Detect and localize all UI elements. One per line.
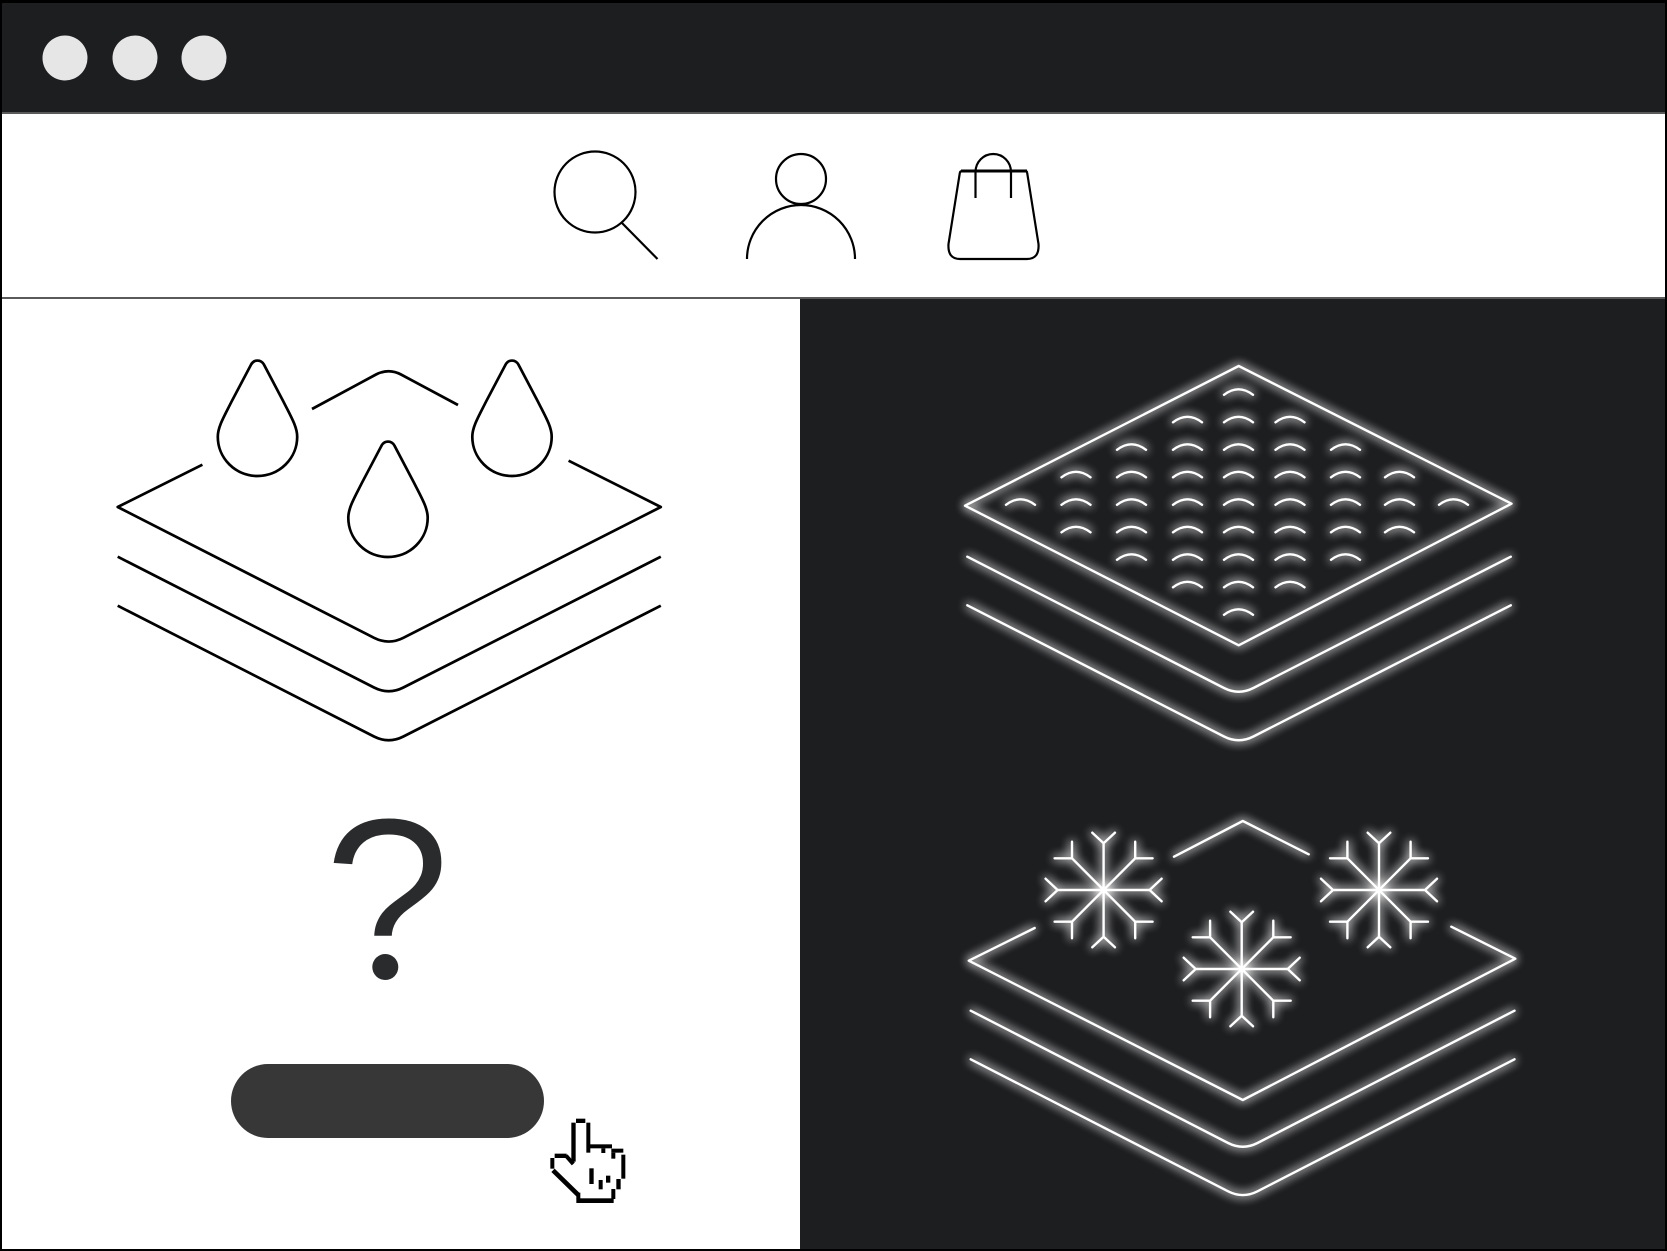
panel: textured fabric layers with glow (965, 366, 1512, 740)
icon: water drop right (472, 361, 552, 476)
panel: waterproof fabric layers (118, 361, 661, 740)
top fabric layer diamond (965, 366, 1512, 645)
icon: user (747, 154, 855, 259)
icon: shopping bag (948, 154, 1039, 259)
third fabric layer (971, 1059, 1514, 1195)
icon: water drop left (218, 361, 297, 476)
icon: snowflake left (1046, 833, 1162, 947)
panel: insulating fabric layers with snowflakes (969, 821, 1515, 1195)
panel: browser title bar (0, 0, 1667, 113)
second fabric layer (118, 557, 661, 691)
icon: snowflake centre (1184, 912, 1300, 1026)
third fabric layer (967, 605, 1511, 740)
panel: dark right content area (800, 298, 1667, 1251)
button (231, 1064, 544, 1138)
top fabric layer outline (118, 371, 661, 642)
question mark: ? (323, 770, 451, 1029)
icon: pixel hand cursor (550, 1119, 625, 1203)
icon: water drop centre (348, 442, 428, 557)
top fabric layer outline (969, 821, 1515, 1100)
second fabric layer (971, 1011, 1514, 1147)
third fabric layer (118, 606, 661, 740)
icon: snowflake right (1321, 833, 1437, 947)
fabric texture arcs (1006, 389, 1468, 615)
icon: search magnifier (554, 152, 658, 259)
second fabric layer (967, 557, 1511, 692)
panel: navigation icons (554, 152, 1039, 259)
